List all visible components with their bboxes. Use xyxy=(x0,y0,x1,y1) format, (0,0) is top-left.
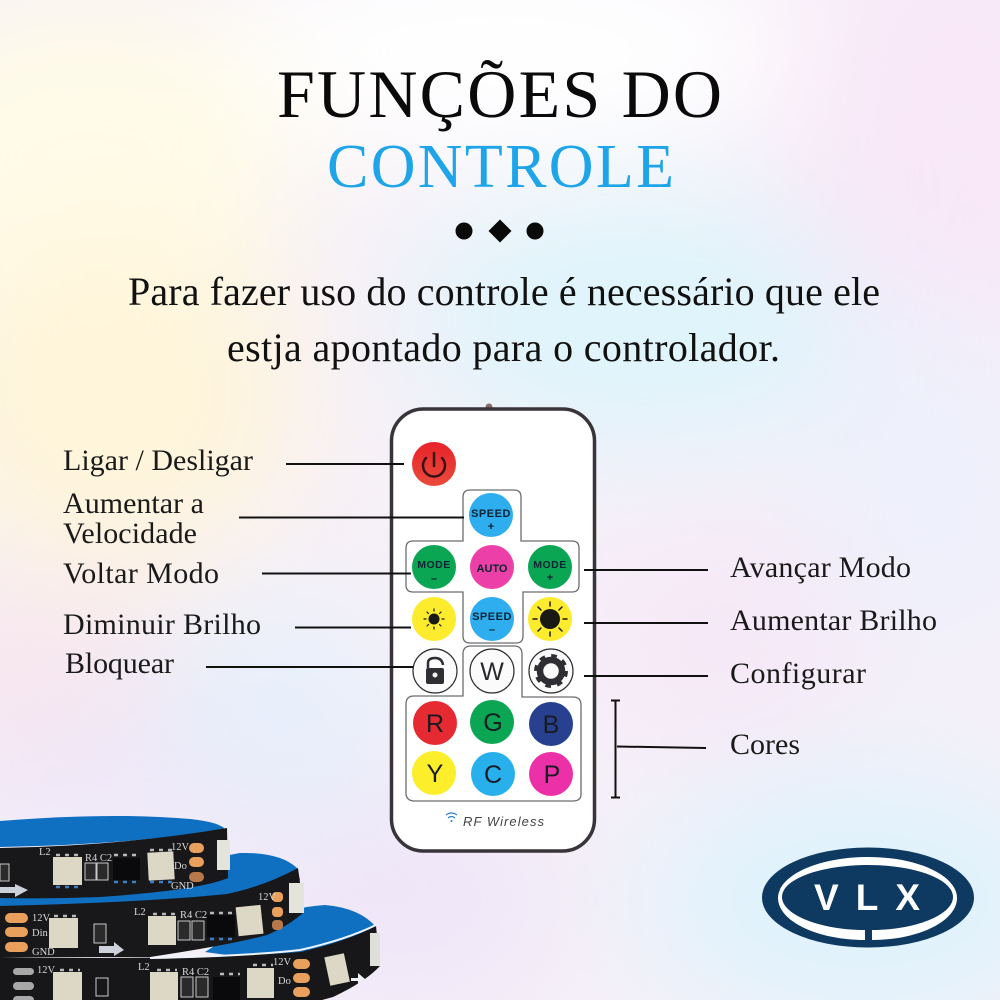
logo text: VLX xyxy=(814,877,920,918)
speed minus button: SPEED xyxy=(472,611,512,623)
colour buttons: P xyxy=(544,761,560,789)
LED strip xyxy=(0,816,380,1000)
left labels with leader lines xyxy=(63,444,464,680)
label: diminuir brilho: Diminuir Brilho xyxy=(63,608,261,641)
colour buttons xyxy=(412,700,573,796)
label: configurar: Configurar xyxy=(730,657,866,690)
strip 2 xyxy=(0,853,304,958)
strip 1 components: GND xyxy=(171,881,194,892)
strip 3 components xyxy=(13,953,365,1000)
right labels with leader lines xyxy=(584,551,937,798)
button panels xyxy=(406,490,581,801)
strip 3 components: Do xyxy=(278,976,291,987)
colour buttons: R xyxy=(426,710,444,738)
label: bloquear: Bloquear xyxy=(65,647,174,680)
W button: W xyxy=(480,658,504,686)
strip 1 components: R4 C2 xyxy=(85,853,112,864)
label: avançar modo: Avançar Modo xyxy=(730,551,911,584)
strip 1 components: L2 xyxy=(39,847,51,858)
intro text: Para fazer uso do controle é necessário que ele xyxy=(128,269,880,314)
ornament: dots and diamond xyxy=(456,220,544,242)
mode minus button: – xyxy=(431,573,437,585)
mode minus button: MODE xyxy=(417,559,451,571)
remote control xyxy=(392,404,594,851)
strip 2 components: 12V xyxy=(258,892,276,903)
label: aumentar a velocidade: Velocidade xyxy=(63,517,197,550)
label: ligar / desligar: Ligar / Desligar xyxy=(63,444,253,477)
strip 2 components: R4 C2 xyxy=(180,910,207,921)
strip 2 components: Din xyxy=(32,928,48,939)
brightness up button xyxy=(528,597,572,641)
mode minus button xyxy=(412,545,456,589)
mode plus button: + xyxy=(547,572,553,584)
logo ring xyxy=(778,857,957,940)
label: cores with bracket: Cores xyxy=(730,728,800,761)
speed minus button: – xyxy=(489,624,495,636)
RF Wireless label: RF Wireless xyxy=(463,814,544,829)
speed plus button: SPEED xyxy=(471,508,511,520)
intro text xyxy=(128,269,880,370)
strip 2 components xyxy=(5,892,283,958)
auto button: AUTO xyxy=(477,563,508,575)
label: cores with bracket xyxy=(611,700,800,798)
label: aumentar a velocidade xyxy=(63,487,464,550)
strip 1 components: Do xyxy=(174,861,187,872)
strip 2 components: L2 xyxy=(134,907,146,918)
strip 2 components: 12V xyxy=(32,913,50,924)
W button xyxy=(470,649,514,693)
mode plus button xyxy=(528,545,572,589)
lock button xyxy=(413,649,457,693)
remote body xyxy=(392,404,594,851)
label: voltar modo: Voltar Modo xyxy=(63,557,219,590)
gear button xyxy=(529,649,573,693)
power button xyxy=(412,442,456,486)
mode plus button: MODE xyxy=(533,559,567,571)
colour buttons: B xyxy=(543,711,559,739)
speed plus button: + xyxy=(488,521,494,533)
title line 1: FUNÇÕES DO xyxy=(277,56,722,132)
auto button xyxy=(470,545,514,589)
strip 3 xyxy=(0,905,380,1000)
label: aumentar a velocidade: Aumentar a xyxy=(63,487,204,520)
title line 2: CONTROLE xyxy=(327,133,674,201)
brightness down button xyxy=(412,597,456,641)
intro text: estja apontado para o controlador. xyxy=(227,325,780,370)
colour buttons: Y xyxy=(427,760,444,788)
speed plus button xyxy=(469,493,513,537)
strip 2 components: GND xyxy=(32,947,55,958)
strip 3 components: R4 C2 xyxy=(182,967,209,978)
strip 3 components: 12V xyxy=(37,965,56,976)
strip 1 xyxy=(0,816,230,898)
strip 1 components xyxy=(0,842,204,897)
strip 1 components: 12V xyxy=(171,842,190,853)
colour buttons: G xyxy=(483,709,503,737)
label: aumentar brilho: Aumentar Brilho xyxy=(730,604,937,637)
strip 3 components: 12V xyxy=(273,957,292,968)
strip 3 components: L2 xyxy=(138,962,150,973)
speed minus button xyxy=(470,597,514,641)
VLX logo xyxy=(762,848,974,948)
title xyxy=(277,56,722,201)
colour buttons: C xyxy=(484,761,502,789)
